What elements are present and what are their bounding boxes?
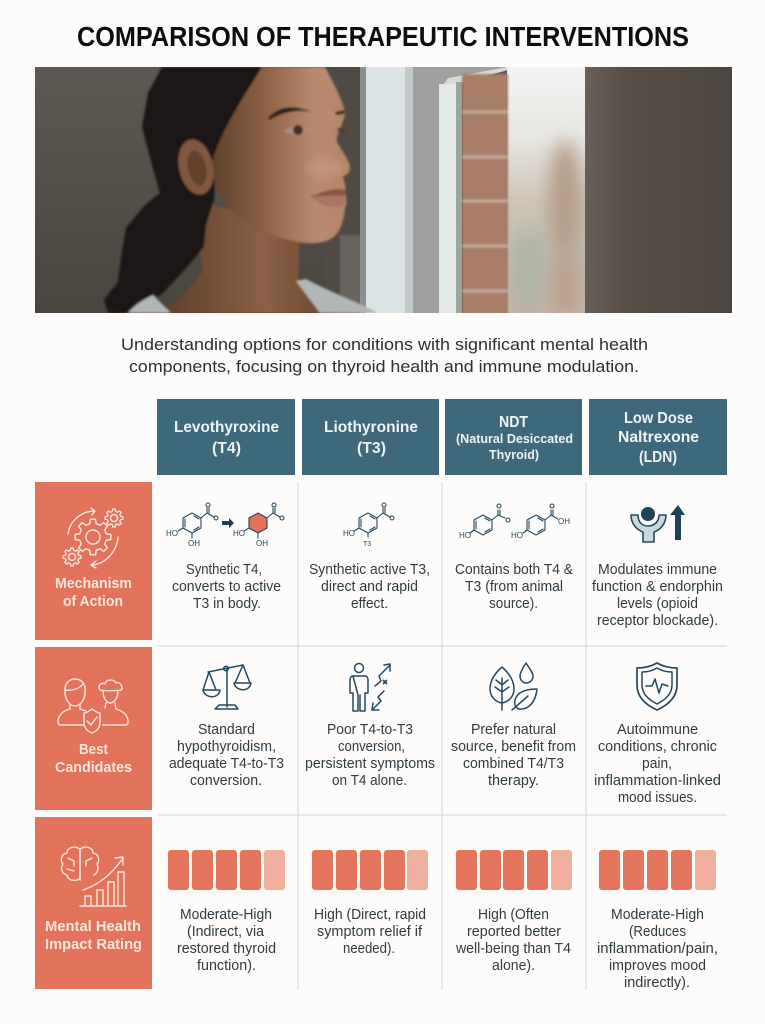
text: T4 candidates [169,722,284,789]
text: NDT candidates: Prefer natural [471,722,556,738]
face [212,67,350,243]
row label: Mechanism of Action: Mechanism [55,575,132,592]
header: Low Dose Naltrexone: Naltrexone [618,429,699,446]
text: T4 impact: function). [197,958,256,974]
subtitle: components, focusing on thyroid health and immune modulation. [129,357,639,376]
header: Levothyroxine: Levothyroxine [174,419,279,436]
text: LDN mechanism: receptor blockade). [597,613,718,629]
row label: Mental Health Impact Rating [35,817,152,989]
icon: two people and shield [58,679,128,733]
text: T4 impact: (Indirect, via [187,924,265,940]
text: LDN candidates: pain, [642,756,672,772]
text: LDN mechanism: function & endorphin [592,579,723,595]
text: NDT mechanism: source). [489,596,538,612]
row label: Mental Health Impact Rating: Impact Rating [45,936,142,953]
header: Liothyronine [302,399,439,475]
photo: woman looking out of a window [35,67,732,320]
text: NDT candidates [451,722,576,789]
icon: T4 to T3 molecules: HO [166,529,178,538]
text: LDN mechanism: Modulates immune [598,562,717,578]
icon: NDT molecules: OH [558,517,570,526]
text: T4 candidates: conversion. [190,773,262,789]
title: COMPARISON OF THERAPEUTIC INTERVENTIONS [77,21,689,52]
header: NDT: Thyroid) [489,448,539,462]
text: NDT impact: well-being than T4 [455,941,571,957]
text: LDN candidates: mood issues. [618,790,697,806]
text: NDT impact [455,907,571,974]
icon: balance scale [203,665,251,709]
text: NDT mechanism: T3 (from animal [465,579,563,595]
icon: T4 to T3 molecules: OH [256,539,268,548]
text: T4 mechanism: Synthetic T4, [186,562,262,578]
neck [160,200,322,313]
text: LDN impact: improves mood [609,958,706,974]
brow, eyes, lips [268,107,345,120]
text: T4 candidates: hypothyroidism, [177,739,276,755]
text: T4 mechanism: converts to active [172,579,281,595]
subtitle: Understanding options for conditions with significant mental health [121,335,648,354]
icon: person with arrows [350,664,390,711]
text: T4 candidates: adequate T4-to-T3 [169,756,284,772]
row label: Best Candidates: Best [79,741,108,758]
icon: leaves and water drop [490,663,537,710]
text: LDN mechanism: levels (opioid [617,596,698,612]
text: NDT impact: High (Often [478,907,549,923]
ear [176,138,214,196]
header: Levothyroxine: (T4) [212,440,241,457]
icon: T3 molecule [343,503,394,548]
text: T4 impact [177,907,276,974]
icon: gears with arrows [63,508,123,568]
text: T3 candidates: persistent symptoms [305,756,435,772]
icon: NDT molecules: HO [511,531,523,540]
header: Liothyronine: (T3) [357,440,386,457]
rating bar: Levothyroxine [168,850,285,890]
row label: Mental Health Impact Rating: Mental Health [45,918,141,935]
icon: T4 to T3 molecules: HO [233,529,245,538]
text: T4 mechanism [172,562,281,612]
hair and ponytail [104,67,262,313]
text: T3 candidates: conversion, [338,739,405,755]
text: LDN impact: inflammation/pain, [597,941,718,957]
text: LDN impact: (Reduces [629,924,686,940]
text: T3 mechanism: effect. [351,596,388,612]
text: NDT impact: reported better [467,924,561,940]
icon: T4 to T3 molecules [166,503,284,548]
text: LDN impact: indirectly). [624,975,690,991]
icon: NDT molecules: HO [459,531,471,540]
grid lines [158,482,727,990]
text: NDT mechanism: Contains both T4 & [455,562,573,578]
row label: Best Candidates: Candidates [55,759,132,776]
subtitle [121,335,648,376]
text: NDT candidates: therapy. [488,773,539,789]
text: LDN candidates: Autoimmune [617,722,698,738]
header: Levothyroxine [157,399,295,475]
text: T3 impact: needed). [343,941,395,957]
text: T3 impact: symptom relief if [317,924,423,940]
icon: brain and rising chart [61,847,126,906]
text: NDT impact: alone). [492,958,535,974]
header: NDT: (Natural Desiccated [456,432,573,446]
text: T3 impact [314,907,426,957]
rating bar: Low Dose Naltrexone [599,850,716,890]
header: Low Dose Naltrexone: (LDN) [639,449,677,466]
text: LDN candidates [594,722,721,806]
text: NDT candidates: combined T4/T3 [463,756,564,772]
header: NDT: NDT [499,414,528,431]
text: LDN mechanism [592,562,723,629]
text: T4 mechanism: T3 in body. [193,596,261,612]
text: T4 impact: restored thyroid [177,941,276,957]
icon: shield with pulse [637,663,677,710]
icon: T3 molecule: HO [343,529,355,538]
text: LDN candidates: inflammation-linked [594,773,721,789]
text: NDT candidates: source, benefit from [451,739,576,755]
text: NDT mechanism [455,562,573,612]
shirt [128,279,378,313]
header: Liothyronine: Liothyronine [324,419,418,436]
text: T3 mechanism [309,562,430,612]
text: LDN impact [597,907,718,991]
header: Low Dose Naltrexone [589,399,727,475]
icon: T3 molecule: T3 [363,541,371,548]
icon: NDT molecules [459,504,570,540]
text: T3 candidates: Poor T4-to-T3 [327,722,413,738]
text: LDN impact: Moderate-High [611,907,704,923]
text: T3 mechanism: Synthetic active T3, [309,562,430,578]
rating bar: Liothyronine [312,850,428,890]
header: NDT [445,399,582,475]
icon: T4 to T3 molecules: OH [188,539,200,548]
rating bar: NDT [456,850,572,890]
text: T3 impact: High (Direct, rapid [314,907,426,923]
header: Low Dose Naltrexone: Low Dose [624,410,693,427]
row label: Best Candidates [35,647,152,810]
icon: opioid receptor with up arrow [631,505,685,542]
row label: Mechanism of Action: of Action [63,593,123,610]
row label: Mechanism of Action [35,482,152,640]
text: T4 candidates: Standard [198,722,255,738]
text: T3 candidates: on T4 alone. [332,773,407,789]
text: T4 impact: Moderate-High [180,907,272,923]
text: T3 mechanism: direct and rapid [321,579,418,595]
text: T3 candidates [305,722,435,789]
text: LDN candidates: conditions, chronic [598,739,718,755]
